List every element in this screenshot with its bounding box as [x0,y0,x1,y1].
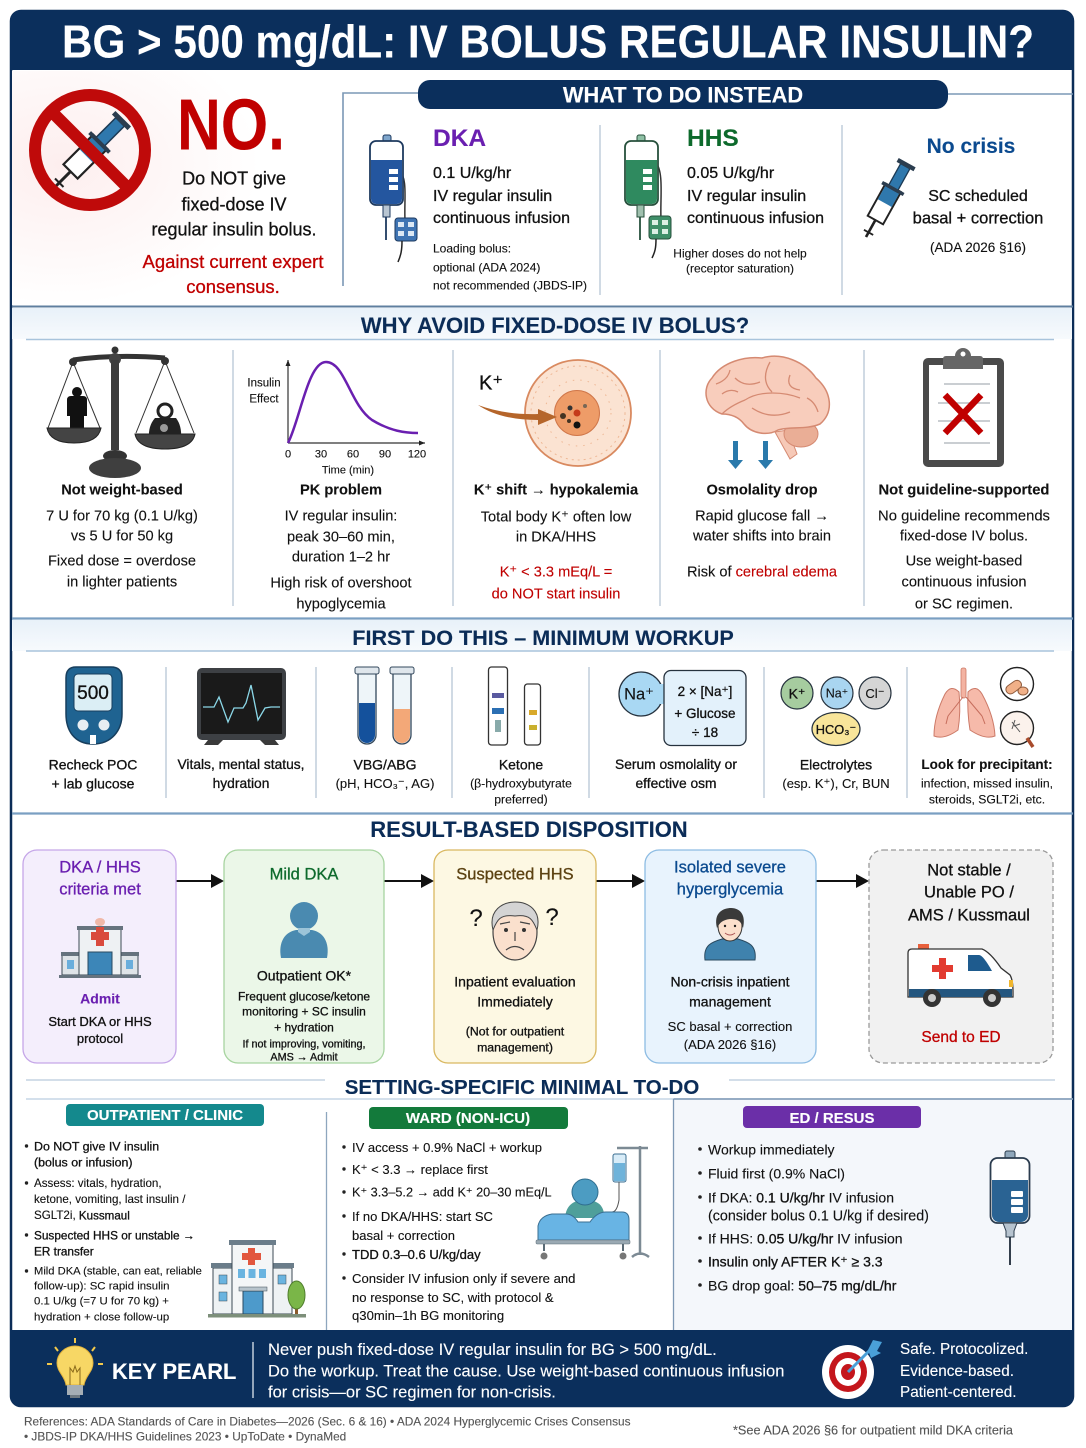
card: DKA/HHS criteria met: Start DKA or HHS [48,1014,152,1029]
card: isolated severe hyperglycemia: hyperglycemia [677,881,784,899]
text: vitals [177,757,305,791]
text: values: Evidence-based. [900,1363,1014,1380]
chart: insulin effect over time: Insulin [247,378,281,390]
text: ketone [470,757,572,807]
list: outpatient steps: Do NOT give IV insulin [34,1140,159,1154]
text: K shift: K⁺ < 3.3 mEq/L = [500,565,612,581]
text: not weight-based: 7 U for 70 kg (0.1 U/kg) [46,509,198,525]
text: references: • JBDS-IP DKA/HHS Guidelines 2023 • UpToDate • DynaMed [24,1430,346,1444]
text: no crisis regimen [913,135,1043,255]
text: serum osmolality: Serum osmolality or [615,757,737,772]
icon: confused elderly patient: ? [545,904,559,931]
text: not guideline-supported: Not guideline-supported [879,483,1049,499]
text: HHS regimen [673,125,824,276]
text: references [24,1415,631,1444]
list: ED steps: (consider bolus 0.1 U/kg if desired) [708,1209,929,1225]
list: ward steps: IV access + 0.9% NaCl + workup [352,1140,542,1155]
column: ward non-ICU [342,1107,649,1323]
text: do not give: Do NOT give [182,169,286,189]
card: suspected HHS: Immediately [477,994,553,1010]
card: not stable: Not stable / [927,862,1011,880]
icon: osmolality formula [619,670,746,746]
text: pearl message [268,1340,784,1402]
text: HHS regimen: (receptor saturation) [686,262,794,276]
card: isolated severe hyperglycemia: (ADA 2026 §16) [684,1037,776,1052]
text: not weight-based [46,483,198,591]
text: K shift: do NOT start insulin [492,587,620,603]
card: mild DKA: monitoring + SC insulin [242,1005,366,1019]
heading pill: WARD (NON-ICU) [406,1110,530,1127]
text: DKA regimen [433,125,587,293]
text: no crisis regimen: No crisis [927,135,1015,158]
text: not guideline-supported: or SC regimen. [915,597,1013,613]
panel: result-based disposition [23,817,1053,1064]
text: VBG: VBG/ABG [353,757,417,773]
panel: answer NO [35,86,323,297]
text: look for precipitant: Look for precipitant: [921,757,1053,772]
icon: electrolytes: HCO₃⁻ [816,722,856,737]
icon: osmolality formula: ÷ 18 [692,725,718,740]
text: DKA regimen: IV regular insulin [433,188,552,205]
text: PK problem: High risk of overshoot [270,576,412,592]
text: do not give: fixed-dose IV [181,195,287,215]
heading: NO: NO. [177,86,285,166]
text: DKA regimen: DKA [433,125,486,152]
card: suspected HHS [434,850,596,1063]
heading pill [369,1107,568,1129]
chart: insulin effect over time: 90 [379,449,391,461]
list: ED steps: Insulin only AFTER K⁺ ≥ 3.3 [708,1254,883,1270]
text: HHS regimen: HHS [687,125,739,152]
text: do not give: regular insulin bolus. [151,220,317,240]
text: look for precipitant [921,757,1053,807]
icon: glucose meter [66,667,122,744]
icon: potassium shift into cell [478,360,631,466]
text: PK problem [270,483,412,613]
card: suspected HHS: management) [477,1041,553,1055]
icon: SC syringe [855,159,917,243]
text: HHS regimen: Higher doses do not help [673,247,807,261]
card: mild DKA [224,850,384,1064]
icon: prohibited syringe [35,95,145,205]
chart: insulin effect over time: 60 [347,449,359,461]
list: outpatient steps: (bolus or infusion) [34,1156,132,1170]
list: outpatient steps: follow-up): SC rapid insulin [34,1281,169,1293]
heading: WHY AVOID FIXED-DOSE IV BOLUS? [361,313,749,338]
list: outpatient steps: 0.1 U/kg (=7 U for 70 kg) + [34,1296,169,1308]
text: footnote: *See ADA 2026 §6 for outpatient mild DKA criteria [733,1424,1014,1438]
icon: patient in bed with IV pole [536,1146,649,1260]
icon: electrolytes: Cl⁻ [865,686,885,701]
icon: potassium shift into cell: K⁺ [479,373,503,395]
text: serum osmolality [615,757,737,791]
text: K shift [474,483,639,603]
icon: lungs, pills and search [934,668,1034,747]
text: not weight-based: Not weight-based [61,483,183,499]
text: electrolytes: Electrolytes [800,757,872,773]
text: values [900,1341,1028,1401]
list: outpatient steps: Assess: vitals, hydration, [34,1177,162,1190]
icon: osmolality formula: + Glucose [674,706,736,721]
callout: against consensus: consensus. [186,276,280,297]
text: DKA regimen: not recommended (JBDS-IP) [433,279,587,293]
text: pearl message: Do the workup. Treat the cause. Use weight-based continuous infusion [268,1363,784,1381]
text: pearl message: Never push fixed-dose IV regular insulin for BG > 500 mg/dL. [268,1340,717,1359]
list: outpatient steps: Suspected HHS or unstable → [34,1229,195,1243]
card: DKA/HHS criteria met: criteria met [59,881,141,899]
card: suspected HHS: (Not for outpatient [466,1025,565,1039]
card: not stable: Send to ED [921,1029,1001,1046]
text: not guideline-supported: fixed-dose IV bolus. [900,529,1028,545]
chart: insulin effect over time: Time (min) [322,465,374,477]
text: VBG [336,757,434,791]
list: ward steps: Consider IV infusion only if severe and [352,1271,575,1286]
text: PK problem: PK problem [300,483,382,499]
icon: hospital [59,918,141,978]
heading: RESULT-BASED DISPOSITION [370,817,688,842]
list: ED steps: BG drop goal: 50–75 mg/dL/hr [708,1278,897,1294]
chart: insulin effect over time: 120 [408,449,426,461]
list: ward steps: K⁺ 3.3–5.2 → add K⁺ 20–30 mEq/L [352,1186,552,1200]
icon: balance scale [47,346,195,478]
icon: clipboard with red X [923,348,1004,467]
text: osmolality drop: water shifts into brain [692,529,831,545]
list: ED steps: Fluid first (0.9% NaCl) [708,1166,845,1182]
card: mild DKA: + hydration [274,1021,334,1035]
text: vitals: hydration [213,776,269,791]
chart: insulin effect over time: 0 [285,449,291,461]
card: mild DKA: Outpatient OK* [257,968,352,984]
card: mild DKA: If not improving, vomiting, [242,1039,366,1051]
card: isolated severe hyperglycemia: SC basal + correction [668,1019,792,1034]
icon: target [822,1340,882,1399]
icon: patient with face [705,908,755,960]
list: ward steps: If no DKA/HHS: start SC [352,1209,493,1224]
text: no crisis regimen: SC scheduled [928,188,1028,205]
icon: confused elderly patient: ? [469,905,483,932]
icon: electrolytes: Na⁺ [826,687,848,701]
list: outpatient steps: SGLT2i, Kussmaul [34,1209,130,1222]
text: electrolytes [782,757,890,791]
icon: IV bag [990,1151,1030,1265]
text: PK problem: IV regular insulin: [285,509,397,525]
text: pearl message: for crisis—or SC regimen for non-crisis. [268,1384,556,1402]
icon: brain with down arrows [706,356,829,469]
list: ED steps [698,1142,929,1294]
icon: light bulb [47,1338,103,1398]
list: outpatient steps: Mild DKA (stable, can eat, reliable [34,1266,202,1278]
heading pill: WHAT TO DO INSTEAD [563,83,803,108]
text: not weight-based: vs 5 U for 50 kg [71,529,173,545]
text: HHS regimen: 0.05 U/kg/hr [687,165,775,182]
card: not stable: AMS / Kussmaul [908,907,1030,925]
text: VBG: (pH, HCO₃⁻, AG) [336,776,434,791]
list: ward steps: basal + correction [352,1228,455,1243]
icon: glucose meter: 500 [77,683,109,704]
text: not guideline-supported: No guideline recommends [878,509,1050,525]
text: osmolality drop: Risk of cerebral edema [687,565,838,581]
text: no crisis regimen: basal + correction [913,210,1043,228]
panel: what to do instead [343,80,1073,295]
text: not guideline-supported: continuous infusion [902,575,1026,591]
card: mild DKA: Mild DKA [270,866,338,884]
card: DKA/HHS criteria met [23,850,176,1063]
chart: insulin effect over time: Effect [249,394,279,406]
card: not stable [869,850,1053,1063]
icon: confused elderly patient [469,902,559,960]
text: do not give [151,169,317,240]
card: isolated severe hyperglycemia: Isolated severe [674,859,786,877]
card: isolated severe hyperglycemia [645,850,816,1063]
card: mild DKA: Frequent glucose/ketone [238,990,370,1004]
list: ward steps: TDD 0.3–0.6 U/kg/day [352,1247,481,1262]
text: no crisis regimen: (ADA 2026 §16) [930,240,1026,255]
icon: patient silhouette [280,902,328,958]
text: serum osmolality: effective osm [635,776,717,791]
column: outpatient clinic [25,1104,306,1324]
text: PK problem: duration 1–2 hr [292,550,390,566]
text: osmolality drop: Osmolality drop [706,483,818,499]
text: K shift: in DKA/HHS [516,530,596,546]
icon: vital signs monitor [197,668,286,745]
text: not guideline-supported [878,483,1050,613]
card: DKA/HHS criteria met: Admit [80,991,120,1007]
text: PK problem: peak 30–60 min, [287,530,395,546]
icon: ambulance [908,944,1013,1007]
text: look for precipitant: steroids, SGLT2i, etc. [929,793,1045,807]
card: isolated severe hyperglycemia: management [689,994,771,1010]
panel: setting-specific minimal to-do [25,1076,1073,1330]
list: ED steps: Workup immediately [708,1142,835,1158]
text: recheck POC: + lab glucose [52,776,135,792]
callout: against consensus [143,251,323,297]
heading pill: ED / RESUS [789,1110,875,1127]
heading pill [66,1104,264,1126]
column: ED resus [698,1106,1030,1294]
panel: why avoid fixed-dose IV bolus [12,308,1072,613]
icon: electrolytes [781,677,891,746]
text: values: Patient-centered. [900,1384,1016,1401]
card: DKA/HHS criteria met: protocol [77,1031,123,1046]
text: ketone: Ketone [499,757,543,773]
icon: electrolytes: K⁺ [789,686,805,702]
text: PK problem: hypoglycemia [296,597,386,613]
card: not stable: Unable PO / [924,884,1014,902]
heading: SETTING-SPECIFIC MINIMAL TO-DO [345,1076,699,1099]
text: DKA regimen: Loading bolus: [433,242,511,256]
list: outpatient steps: ketone, vomiting, last insulin / [34,1193,186,1206]
card: suspected HHS: Inpatient evaluation [454,974,576,990]
heading pill: OUTPATIENT / CLINIC [87,1107,243,1124]
list: ward steps: q30min–1h BG monitoring [352,1308,504,1323]
text: K shift: K⁺ shift → hypokalemia [474,483,639,499]
icon: clinic building [208,1240,306,1318]
text: HHS regimen: IV regular insulin [687,188,806,205]
text: not guideline-supported: Use weight-based [906,554,1022,570]
icon: blood gas tubes [355,667,414,744]
text: not weight-based: Fixed dose = overdose [48,554,196,570]
callout: against consensus: Against current expert [143,251,323,272]
arrows between cards [176,874,869,888]
text: references: References: ADA Standards of Care in Diabetes—2026 (Sec. 6 & 16) • ADA 2024 Hyperglycemic Crises Consensus [24,1415,631,1429]
text: DKA regimen: 0.1 U/kg/hr [433,165,512,182]
panel: first do this minimum workup [12,620,1072,807]
list: ward steps: K⁺ < 3.3 → replace first [352,1162,488,1177]
text: K shift: Total body K⁺ often low [481,510,632,526]
list: outpatient steps [25,1140,202,1324]
text: not weight-based: in lighter patients [67,575,177,591]
icon: osmolality formula: Na⁺ [624,686,654,704]
list: ED steps: If DKA: 0.1 U/kg/hr IV infusion [708,1190,894,1206]
text: DKA regimen: continuous infusion [433,210,570,227]
icon: ketone strips [488,667,540,745]
heading pill [743,1106,921,1128]
card: suspected HHS: Suspected HHS [456,866,574,884]
card: isolated severe hyperglycemia: Non-crisis inpatient [670,974,790,990]
text: ketone: preferred) [494,793,548,807]
card: DKA/HHS criteria met: DKA / HHS [59,859,141,877]
text: osmolality drop: Rapid glucose fall → [695,509,829,525]
text: vitals: Vitals, mental status, [177,757,305,772]
chart: insulin effect over time: 30 [315,449,327,461]
text: recheck POC: Recheck POC [49,757,137,773]
chart: insulin effect over time [247,360,426,477]
heading: key pearl: KEY PEARL [112,1359,236,1384]
text: recheck POC [49,757,137,792]
icon: DKA IV bag [370,135,417,262]
list: ward steps [342,1140,575,1323]
heading: FIRST DO THIS – MINIMUM WORKUP [352,625,734,650]
text: osmolality drop [687,483,838,581]
text: look for precipitant: infection, missed insulin, [921,777,1053,791]
card: mild DKA: AMS → Admit [270,1052,338,1064]
text: DKA regimen: optional (ADA 2024) [433,261,540,275]
heading pill [418,80,948,109]
list: outpatient steps: ER transfer [34,1245,94,1259]
list: ward steps: no response to SC, with protocol & [352,1290,554,1305]
text: ketone: (β-hydroxybutyrate [470,777,572,791]
list: outpatient steps: hydration + close follow-up [34,1312,169,1324]
list: ED steps: If HHS: 0.05 U/kg/hr IV infusion [708,1231,903,1247]
icon: osmolality formula: 2 × [Na⁺] [678,684,732,699]
text: values: Safe. Protocolized. [900,1341,1028,1358]
text: electrolytes: (esp. K⁺), Cr, BUN [782,776,890,791]
text: HHS regimen: continuous infusion [687,210,824,227]
panel: key pearl banner [10,1330,1074,1407]
icon: HHS IV bag [625,135,671,258]
